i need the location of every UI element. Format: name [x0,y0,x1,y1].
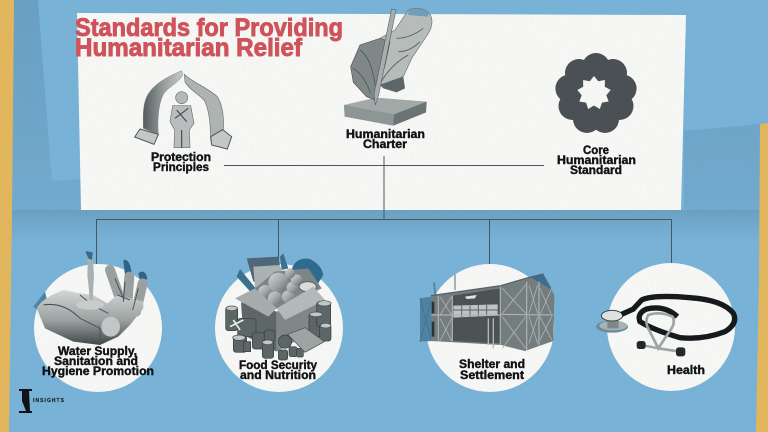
label: Shelter and Settlement [459,359,525,382]
panel: core standards sheet [77,13,686,210]
circle: food security [215,253,343,392]
label: Core Humanitarian Standard: Core [583,145,609,157]
label: Protection Principles: Principles [153,162,209,174]
title: Standards for Providing [75,14,343,42]
label: Health: Health [667,365,705,377]
icon: hand writing on block [344,8,432,126]
label: Core Humanitarian Standard [557,145,636,177]
label: Core Humanitarian Standard: Humanitarian [557,155,636,167]
label: Humanitarian Charter: Humanitarian [346,129,425,141]
label: Food Security [239,360,318,382]
label: Water Supply [42,346,154,378]
label: Protection Principles: Protection [151,152,211,164]
label: Food Security: and Nutrition [240,370,316,382]
logo: Insights: INSIGHTS [33,398,65,404]
label: Core Humanitarian Standard: Standard [570,165,622,177]
icon: hand under water [33,251,147,345]
right yellow strip [756,123,768,432]
icon: food box [226,253,331,360]
label: Water Supply: Water Supply, [58,346,137,358]
label: Shelter and Settlement: Settlement [460,370,524,382]
label: Water Supply: Sanitation and [54,356,138,368]
connector lines [96,156,672,278]
title [75,14,343,62]
label: Water Supply: Hygiene Promotion [42,366,154,378]
icon: protecting hands [135,71,232,149]
logo: Insights [19,389,65,413]
icon: shelter frame building [420,274,554,351]
left yellow strip [0,0,14,432]
label: Humanitarian Charter [346,129,425,151]
circle: health [596,263,735,391]
icon: core standard flower [555,53,637,133]
label: Food Security: Food Security [239,360,318,372]
title: Humanitarian Relief [75,34,303,62]
icon: stethoscope [596,296,735,356]
label: Humanitarian Charter: Charter [363,139,408,151]
circle: water supply [33,251,162,392]
circle: shelter [420,264,554,392]
label: Protection Principles [151,152,211,174]
label: Shelter and Settlement: Shelter and [459,359,525,371]
